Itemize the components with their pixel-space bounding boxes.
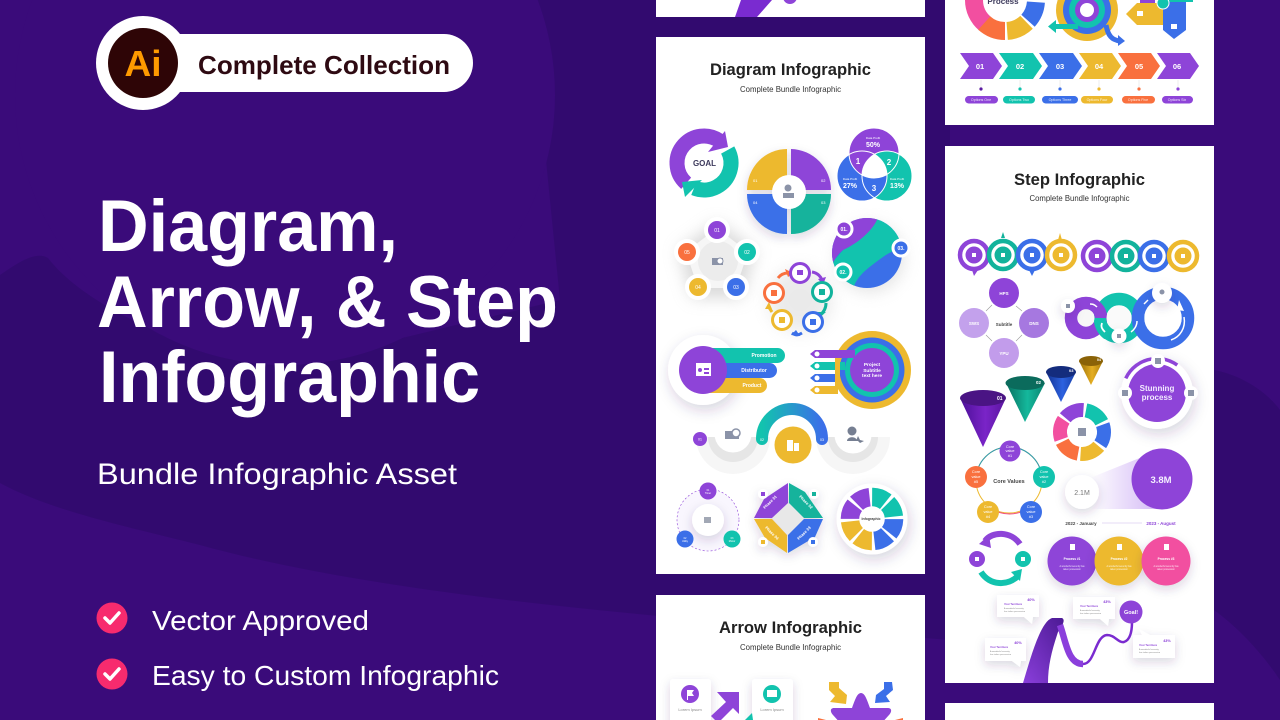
concentric project target: Project (864, 362, 881, 368)
pill labels diagram: Product (743, 383, 762, 389)
circular arrow nodes (764, 264, 832, 336)
subheading: Complete Bundle Infographic (740, 84, 842, 94)
core values circle: Core (1027, 505, 1035, 509)
ribbon goal path: Goal! (1124, 610, 1138, 616)
main title: Infographic (99, 337, 480, 418)
dashed circle nodes: Utility (682, 540, 689, 543)
callout: top middle: has taken possession (1080, 612, 1102, 615)
growth stat comparison: 2.1M (1074, 490, 1090, 497)
wave circle (830, 215, 909, 292)
callout: lower left: 40% (1014, 641, 1022, 645)
feature list (96, 602, 499, 691)
three process circles: taken possession (1157, 568, 1176, 571)
pill labels diagram: Distributor (741, 368, 767, 374)
panel: diagram infographic (656, 37, 925, 574)
venn diagram (837, 128, 912, 201)
arrow card one: Lorem Ipsum (678, 707, 702, 712)
icon: Ai logo (108, 28, 178, 98)
three process circles: taken possession (1063, 568, 1082, 571)
concentric project target (810, 331, 911, 409)
core values circle: Core Values (993, 479, 1025, 485)
panel: next card sliver (945, 703, 1214, 720)
core values circle: #4 (986, 515, 990, 519)
callout: top left: Your Text Here (1004, 602, 1023, 606)
four node cycle: Subtitle (996, 322, 1013, 327)
panel: top arrow process card (945, 0, 1214, 125)
chevron process row (960, 53, 1199, 79)
three process circles: A wonderful serenity has (1153, 565, 1179, 568)
two arrow cycle (969, 534, 1031, 583)
pentagon step diagram: 01 (714, 228, 720, 234)
main title (97, 186, 558, 418)
dashed circle nodes: Timer (705, 492, 711, 495)
cone 01: 01 (997, 396, 1003, 402)
core values circle (965, 440, 1055, 523)
core values circle: value (1005, 449, 1015, 453)
core values circle: #1 (1008, 454, 1012, 458)
growth stat comparison: 3.8M (1150, 475, 1172, 486)
phase diamond: Phase 04 (764, 525, 781, 541)
heading: Arrow Infographic (719, 619, 862, 637)
core values circle: value (971, 475, 981, 479)
callout: lower right: 43% (1163, 639, 1171, 643)
arc step row (693, 409, 890, 474)
funnel cones (960, 356, 1103, 447)
core values circle: Core (1040, 470, 1048, 474)
cone 03: 03 (1069, 368, 1074, 373)
venn diagram: Data Profit (866, 136, 880, 140)
callout: top left (997, 595, 1039, 624)
venn diagram: 50% (866, 142, 881, 149)
date range: 2022 - January (1065, 521, 1097, 526)
process segmented ring (965, 0, 1045, 40)
pentagon step diagram: 02 (744, 250, 750, 256)
arrow card two (752, 679, 793, 720)
callout: lower left (985, 638, 1026, 667)
feature: easy to custom: Easy to Custom Infographic (152, 660, 499, 691)
callout: top middle: A wonderful serenity (1080, 609, 1101, 612)
three process circles (1048, 536, 1190, 586)
cone 01 (960, 390, 1006, 447)
callout: lower right (1133, 629, 1175, 658)
venn diagram: 2 (887, 158, 892, 167)
quadrant diagram: 03 (821, 200, 826, 205)
option markers and pills: Options Five (1128, 98, 1148, 102)
hexagon arrow cluster (1126, 0, 1193, 39)
quadrant diagram: 02 (821, 178, 826, 183)
arc step row: 02 (760, 438, 764, 442)
wave circle: 01. (841, 227, 848, 233)
heading: Step Infographic (1014, 171, 1145, 189)
badge label: Complete Collection (198, 50, 450, 80)
quadrant diagram: 01 (753, 178, 758, 183)
core values circle: #5 (974, 480, 978, 484)
three process circles: A wonderful serenity has (1106, 565, 1132, 568)
pill labels diagram: Promotion (752, 353, 776, 359)
chevron process row: 04 (1095, 62, 1104, 71)
option markers and pills: Options Two (1009, 98, 1029, 102)
venn diagram: 13% (890, 183, 905, 190)
core values circle: value (983, 510, 993, 514)
four node cycle: SWS (969, 321, 979, 326)
feature: vector approved (96, 602, 369, 636)
ribbon goal path (1023, 600, 1142, 683)
panel: step infographic (945, 146, 1214, 683)
pentagon step diagram (676, 219, 758, 298)
concentric project target: text here (862, 373, 882, 379)
core values circle: Core (984, 505, 992, 509)
stunning process circle: process (1142, 393, 1173, 402)
venn diagram: 27% (843, 183, 858, 190)
venn diagram: 1 (856, 157, 861, 166)
pill labels diagram (668, 335, 785, 405)
subheading: Complete Bundle Infographic (1030, 193, 1130, 203)
four node cycle: HPS (999, 291, 1009, 296)
option markers and pills: Options Four (1087, 98, 1108, 102)
core values circle: Core (1006, 445, 1014, 449)
option markers and pills: Options Six (1168, 98, 1186, 102)
four node cycle: DNS (1029, 321, 1039, 326)
callout: top left: has taken possession (1004, 610, 1026, 613)
stunning process circle (1111, 347, 1203, 439)
dashed circle nodes (676, 482, 740, 551)
option markers and pills: Options One (971, 98, 991, 102)
dashed circle nodes: Motor (729, 540, 735, 543)
three process circles: A wonderful serenity has (1059, 565, 1085, 568)
core values circle: #2 (1042, 480, 1046, 484)
subtitle: Bundle Infographic Asset (97, 458, 458, 491)
three process circles: Process #3 (1158, 557, 1175, 561)
core values circle: #3 (1029, 515, 1033, 519)
cone 02: 02 (1036, 380, 1042, 385)
core values circle: Core (972, 470, 980, 474)
three process circles: taken possession (1110, 568, 1129, 571)
option markers and pills: Options Three (1049, 98, 1071, 102)
date range (1065, 521, 1176, 526)
badge: Ai Complete Collection (96, 16, 473, 110)
ring step row (960, 232, 1197, 276)
segmented wheel (836, 484, 908, 554)
quadrant diagram (747, 149, 831, 234)
star with converging arrows (818, 682, 903, 720)
callout: lower left: A wonderful serenity (990, 650, 1011, 653)
callout: top middle: Your Text Here (1080, 604, 1099, 608)
cone 02 (1006, 376, 1045, 422)
linked ring chain (1061, 283, 1188, 344)
cone 04 (1079, 356, 1103, 385)
phase diamond (754, 483, 823, 553)
dashed circle nodes: 01 (707, 489, 710, 492)
goal cycle (666, 125, 742, 201)
icon: Ai logo: Ai (124, 43, 162, 84)
four node cycle (959, 278, 1049, 368)
callout: lower left: has taken possession (990, 653, 1012, 656)
arc step row: 03 (820, 438, 824, 442)
arrow card one (670, 679, 711, 720)
three process circles: Process #1 (1064, 557, 1081, 561)
venn diagram: Data Profit (890, 177, 904, 181)
option markers and pills (965, 80, 1193, 104)
purple rising arrow (711, 692, 739, 720)
teal arrow (745, 713, 753, 720)
callout: top left: A wonderful serenity (1004, 607, 1025, 610)
heading: Diagram Infographic (710, 61, 871, 79)
stunning process circle: Stunning (1140, 384, 1174, 393)
chevron process row: 06 (1173, 62, 1181, 71)
pentagon step diagram: 03 (733, 285, 739, 291)
cone 04: 04 (1097, 358, 1101, 362)
chevron process row: 02 (1016, 62, 1024, 71)
callout: lower right: Your Text Here (1139, 643, 1158, 647)
venn diagram: 3 (872, 184, 877, 193)
dashed circle nodes: 02 (684, 537, 687, 540)
arrow card two: Lorem Ipsum (760, 707, 784, 712)
callout: top middle: 43% (1103, 600, 1111, 604)
chevron process row: 05 (1135, 62, 1143, 71)
feature: vector approved: Vector Approved (152, 605, 369, 636)
dashed circle nodes: 03 (731, 537, 734, 540)
pentagon step diagram: 04 (695, 285, 701, 291)
callout: top left: 40% (1027, 598, 1035, 602)
pentagon step diagram: 05 (684, 250, 690, 256)
quadrant diagram: 04 (753, 200, 758, 205)
callout: lower right: has taken possession (1139, 651, 1161, 654)
date range: 2023 - August (1146, 521, 1176, 526)
arc step row: 01 (698, 438, 702, 442)
callout: top middle (1073, 597, 1115, 626)
venn diagram: Data Profit (843, 177, 857, 181)
goal cycle: GOAL (693, 159, 716, 168)
wave circle: 02. (840, 270, 847, 276)
cone 03 (1046, 366, 1076, 402)
growth stat comparison (1065, 448, 1192, 510)
callout: lower left: Your Text Here (990, 645, 1009, 649)
three process circles: Process #2 (1111, 557, 1128, 561)
phase diamond: Phase 02 (798, 494, 815, 510)
concentric project target: Subtitle (863, 368, 881, 374)
panel: arrow infographic (656, 595, 925, 720)
four node cycle: YPU (999, 351, 1009, 356)
subheading: Complete Bundle Infographic (740, 642, 842, 652)
wave circle: 03. (898, 246, 905, 252)
swirl target (1048, 0, 1125, 46)
chevron process row: 03 (1056, 62, 1064, 71)
phase diamond: Phase 03 (796, 524, 812, 541)
panel: previous card sliver (656, 0, 925, 17)
callout: lower right: A wonderful serenity (1139, 648, 1160, 651)
segmented wheel: Infographic (861, 517, 881, 521)
core values circle: value (1039, 475, 1049, 479)
phase diamond: Phase 01 (762, 493, 778, 510)
main title: Diagram, (98, 186, 398, 267)
arrow ring (1051, 401, 1113, 463)
core values circle: value (1026, 510, 1036, 514)
main title: Arrow, & Step (97, 262, 558, 343)
chevron process row: 01 (976, 62, 984, 71)
